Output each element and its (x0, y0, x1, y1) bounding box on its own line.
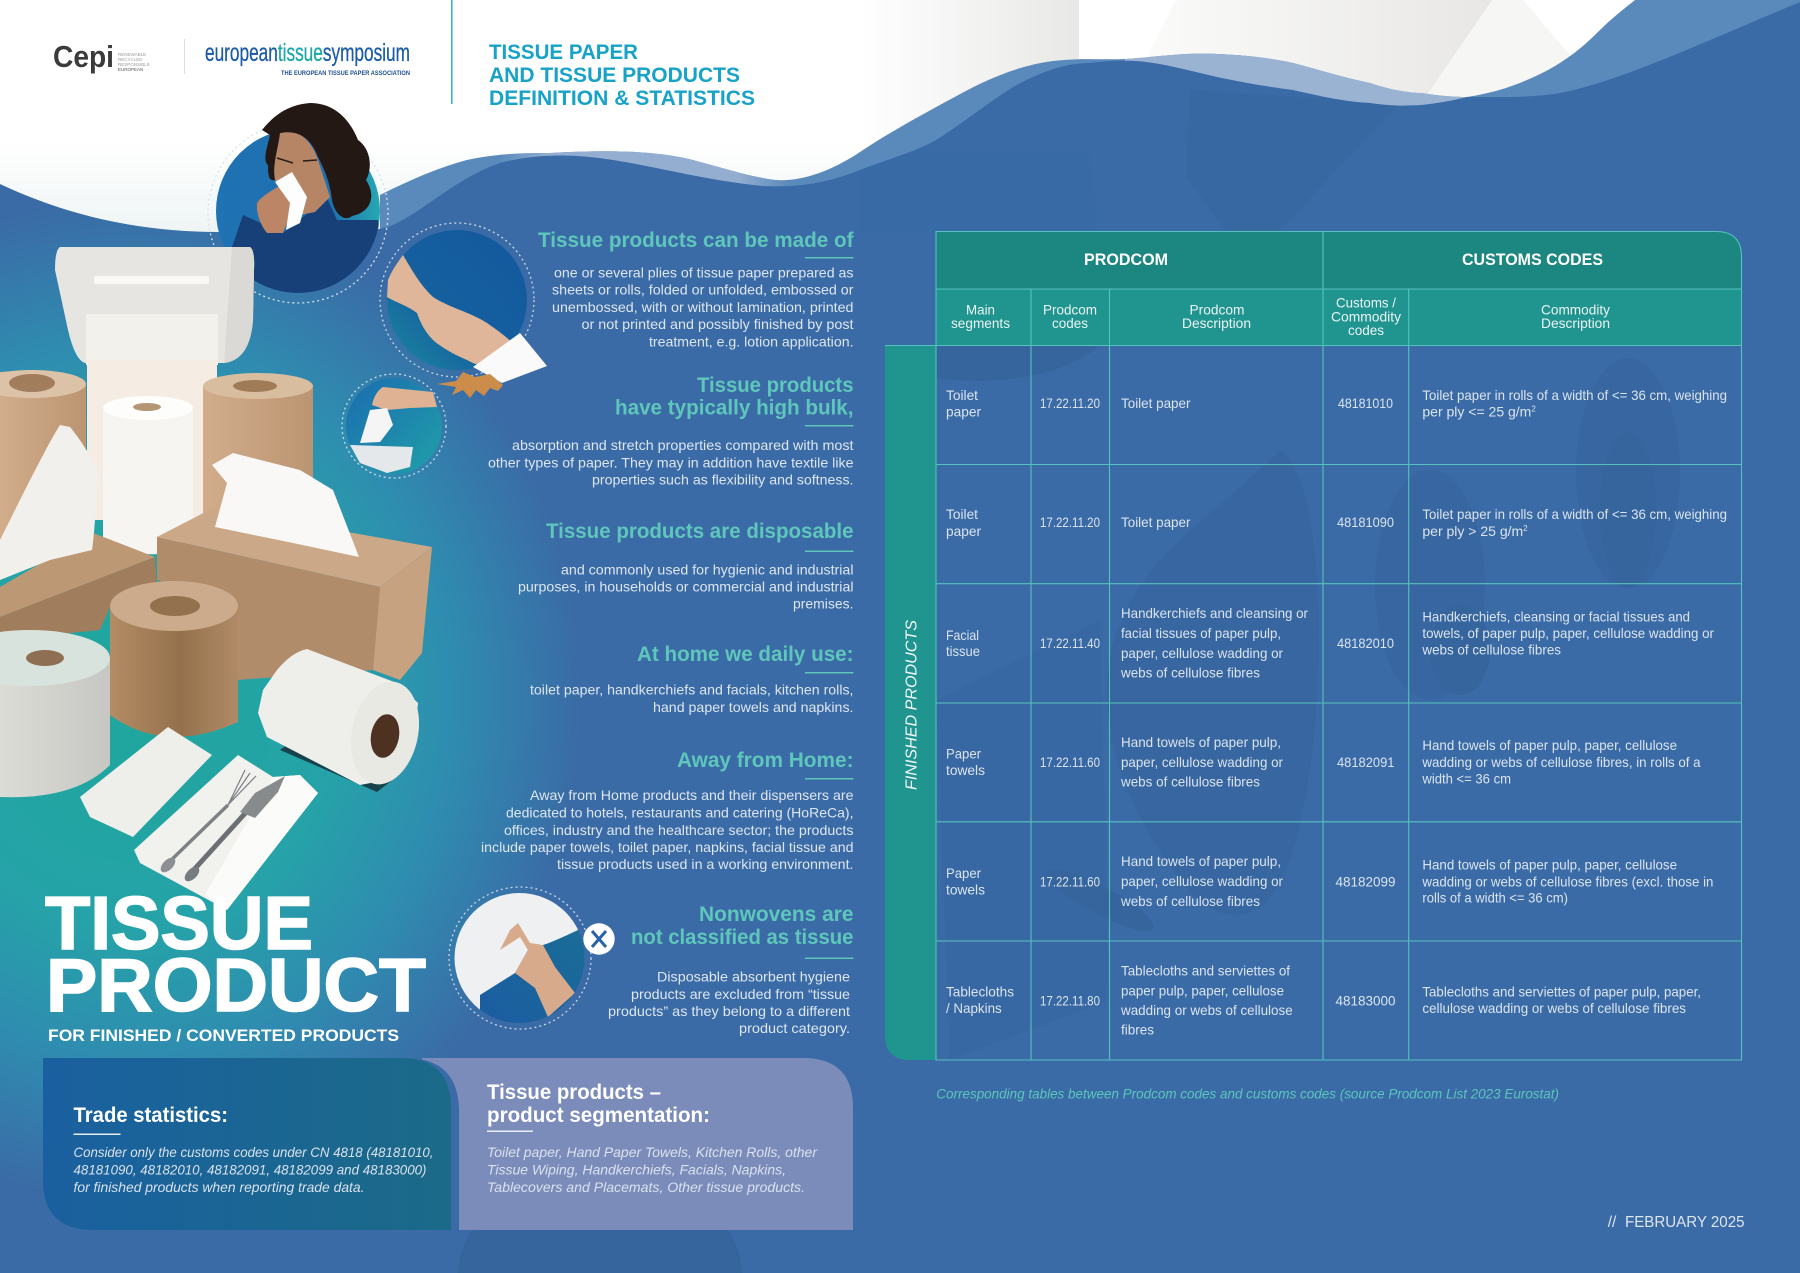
row: toilet paper 48181090: 17.22.11.20 (1040, 514, 1100, 530)
table grid (885, 232, 1742, 1060)
panel: trade statistics: 48181090, 48182010, 48182091, 48182099 and 48183000) (74, 1162, 426, 1178)
column headers: segments (951, 315, 1010, 331)
text block: high bulk: other types of paper. They may in addition have textile like (488, 454, 854, 470)
row: paper towels 48182099: wadding or webs of cellulose fibres (excl. those in (1421, 873, 1713, 889)
main title: FOR FINISHED / CONVERTED PRODUCTS (48, 1027, 399, 1045)
logo: european tissue symposium: europeantissuesymposium (205, 39, 410, 67)
title: definition and statistics (489, 40, 755, 110)
row: facial tissue: towels, of paper pulp, paper, cellulose wadding or (1422, 625, 1714, 641)
panel: trade statistics: for finished products when reporting trade data. (74, 1179, 364, 1195)
panel: product segmentation: Tissue Wiping, Handkerchiefs, Facials, Napkins, (487, 1162, 786, 1178)
text block: disposable (518, 520, 854, 612)
text block: away from home: offices, industry and the healthcare sector; the products (504, 822, 854, 838)
row: tablecloths and napkins: Tablecloths and serviettes of (1121, 963, 1290, 979)
column headers: Commodity (1331, 308, 1401, 324)
date: FEBRUARY 2025 (1625, 1214, 1744, 1231)
panel: trade statistics: Trade statistics: (74, 1104, 228, 1127)
row: tablecloths and napkins: / Napkins (946, 1000, 1002, 1016)
text block: nonwovens: Disposable absorbent hygiene (657, 968, 850, 984)
text block: away from home: Away from Home products and their dispensers are (530, 787, 854, 803)
photo: nonwoven material in hand (449, 885, 615, 1029)
row: paper towels 48182099: towels (946, 882, 985, 898)
main title: PRODUCT (46, 943, 426, 1027)
background: ghost rolls (458, 346, 1656, 1273)
row: toilet paper 48181090: per ply > 25 g/m (1422, 523, 1523, 539)
row: toilet paper 48181010: Toilet paper in rolls of a width of <= 36 cm, weighing (1422, 387, 1727, 403)
main title: TISSUE (45, 881, 313, 965)
text block: tissue products can be made of (538, 229, 854, 349)
photo: hand dropping tissue in bin (342, 374, 446, 478)
background: white top area (0, 0, 1800, 260)
row: facial tissue: Handkerchiefs and cleansing or (1121, 605, 1308, 621)
text block: nonwovens: Nonwovens are (699, 903, 854, 926)
panel: product segmentation: Toilet paper, Hand Paper Towels, Kitchen Rolls, other (487, 1144, 818, 1160)
row: paper towels 48182099: Paper (946, 865, 981, 881)
row: toilet paper 48181090: Toilet paper (1121, 514, 1191, 530)
column headers: Commodity (1541, 302, 1610, 318)
panel: product segmentation: product segmentation: (487, 1104, 710, 1127)
row: paper towels 48182099: Hand towels of paper pulp, paper, cellulose (1422, 856, 1677, 872)
logo: Cepi (53, 39, 150, 74)
column headers: Prodcom (1190, 302, 1244, 318)
row: toilet paper 48181010: paper (946, 404, 981, 420)
text block: high bulk: properties such as flexibility and softness. (592, 472, 854, 488)
kraft roll front (110, 581, 238, 737)
row: tablecloths and napkins: 48183000 (1336, 993, 1396, 1009)
column headers: codes (1052, 315, 1088, 331)
text block: tissue products can be made of: Tissue products can be made of (538, 229, 854, 252)
group headers: PRODCOM (1084, 251, 1168, 269)
title: definition and statistics: TISSUE PAPER (489, 40, 638, 64)
row: tablecloths and napkins: wadding or webs of cellulose (1120, 1002, 1293, 1018)
icon: spill splat (437, 372, 503, 398)
title: definition and statistics: DEFINITION & STATISTICS (489, 86, 755, 110)
row: toilet paper 48181090: Toilet paper in rolls of a width of <= 36 cm, weighing (1422, 506, 1727, 522)
text block: nonwovens: products” as they belong to a different (608, 1003, 850, 1019)
row: facial tissue: paper, cellulose wadding or (1121, 645, 1283, 661)
table header bands (936, 232, 1742, 346)
row: paper towels 48182099: 48182099 (1336, 873, 1396, 889)
row: tablecloths and napkins: cellulose wadding or webs of cellulose fibres (1422, 1000, 1686, 1016)
text block: nonwovens (608, 903, 854, 1036)
row: paper towels 48182099: rolls of a width <= 36 cm) (1422, 890, 1568, 906)
white kitchen roll (103, 396, 193, 554)
text block: disposable: Tissue products are disposable (546, 520, 854, 543)
row: facial tissue: webs of cellulose fibres (1120, 665, 1260, 681)
text block: away from home (481, 749, 854, 872)
title: definition and statistics: AND TISSUE PRODUCTS (489, 63, 740, 87)
background: translucent wave layer (380, 0, 1800, 300)
row: paper towels 48182091: width <= 36 cm (1421, 770, 1511, 786)
table source note: Corresponding tables between Prodcom codes and customs codes (source Prodcom List 2023 Eurostat) (936, 1086, 1559, 1102)
text block: disposable: purposes, in households or commercial and industrial (518, 579, 854, 595)
row: toilet paper 48181090: 2 (1523, 524, 1528, 533)
knife (182, 776, 285, 884)
logo: Cepi: EUROPEAN (118, 67, 143, 72)
kraft roll right (203, 373, 313, 520)
text block: nonwovens: product category. (739, 1020, 850, 1036)
row: paper towels 48182091: webs of cellulose fibres (1120, 774, 1260, 790)
left tissue (0, 425, 98, 580)
row: toilet paper 48181090 (946, 506, 1727, 539)
column headers (951, 295, 1610, 338)
text block: at home: toilet paper, handkerchiefs and facials, kitchen rolls, (530, 682, 854, 698)
table: prodcom and customs codes (885, 232, 1742, 1060)
logo: european tissue symposium (205, 39, 410, 77)
panel: product segmentation (380, 1058, 853, 1230)
row: toilet paper 48181010: per ply <= 25 g/m (1422, 404, 1531, 420)
text block: tissue products can be made of: treatment, e.g. lotion application. (649, 333, 854, 349)
logo: Cepi: RENEWABLE (118, 52, 146, 57)
text block: high bulk: Tissue products (697, 374, 854, 397)
column headers: Prodcom (1043, 302, 1097, 318)
text block: at home: At home we daily use: (637, 643, 854, 666)
row: paper towels 48182091: Hand towels of paper pulp, paper, cellulose (1422, 737, 1677, 753)
header logos (53, 39, 410, 77)
main title (45, 881, 426, 1045)
row: tablecloths and napkins: Tablecloths (946, 984, 1014, 1000)
photo: tissue products stack (0, 247, 432, 910)
row: toilet paper 48181010: 48181010 (1338, 395, 1393, 411)
logo: european tissue symposium: THE EUROPEAN TISSUE PAPER ASSOCIATION (281, 71, 410, 77)
dispenser (55, 247, 254, 363)
text block: disposable: premises. (793, 596, 854, 612)
row: paper towels 48182099: Hand towels of paper pulp, (1121, 853, 1281, 869)
text block: away from home: dedicated to hotels, restaurants and catering (HoReCa), (506, 804, 854, 820)
row: facial tissue: webs of cellulose fibres (1421, 642, 1561, 658)
group headers: CUSTOMS CODES (1462, 251, 1603, 269)
text block: tissue products can be made of: sheets or rolls, folded or unfolded, embossed or (552, 282, 854, 298)
row: facial tissue: facial tissues of paper pulp, (1121, 625, 1281, 641)
panel: trade statistics: Consider only the customs codes under CN 4818 (48181010, (74, 1144, 434, 1160)
column headers: Description (1182, 315, 1251, 331)
row: paper towels 48182091: Paper (946, 746, 981, 762)
row: facial tissue: 17.22.11.40 (1040, 635, 1100, 651)
logo: Cepi: Cepi (53, 39, 114, 74)
row: paper towels 48182091: Hand towels of paper pulp, (1121, 734, 1281, 750)
row: tablecloths and napkins: 17.22.11.80 (1040, 993, 1100, 1009)
row: toilet paper 48181010: Toilet paper (1121, 395, 1191, 411)
column headers: codes (1348, 322, 1384, 338)
panel: product segmentation: Tissue products – (487, 1081, 661, 1104)
row: paper towels 48182091: 17.22.11.60 (1040, 754, 1100, 770)
text block: at home (530, 643, 854, 715)
row: tablecloths and napkins: paper pulp, paper, cellulose (1121, 982, 1284, 998)
text block: away from home: include paper towels, toilet paper, napkins, facial tissue and (481, 839, 854, 855)
row: facial tissue (946, 605, 1714, 681)
column headers: Description (1541, 315, 1610, 331)
napkin with cutlery (134, 755, 318, 910)
row: toilet paper 48181010 (946, 387, 1727, 420)
grey roll left (0, 630, 110, 797)
row: paper towels 48182091: paper, cellulose wadding or (1121, 754, 1283, 770)
logo: Cepi: RESPONSIBLE (118, 62, 150, 67)
column headers: Customs / (1336, 295, 1396, 311)
row: toilet paper 48181090: Toilet (946, 506, 978, 522)
side tab: finished products (885, 346, 936, 1060)
text block: high bulk (488, 374, 854, 488)
row: tablecloths and napkins (946, 963, 1701, 1038)
row: paper towels 48182091: wadding or webs of cellulose fibres, in rolls of a (1421, 754, 1701, 770)
text block: disposable: and commonly used for hygienic and industrial (561, 562, 854, 578)
row: toilet paper 48181090: 48181090 (1337, 514, 1394, 530)
tissue emerging (212, 453, 359, 557)
icon: not classified cross (583, 923, 615, 955)
paper sheet (87, 360, 217, 520)
group headers (1084, 251, 1603, 269)
row: facial tissue: Facial (946, 627, 979, 643)
text block: away from home: Away from Home: (677, 749, 854, 772)
text block: tissue products can be made of: one or several plies of tissue paper prepared as (554, 264, 854, 280)
column headers: Main (966, 302, 995, 318)
text block: nonwovens: products are excluded from “tissue (631, 986, 850, 1002)
row: paper towels 48182099: 17.22.11.60 (1040, 873, 1100, 889)
panel: product segmentation: Tablecovers and Placemats, Other tissue products. (487, 1179, 805, 1195)
row: paper towels 48182091 (946, 734, 1701, 790)
text block: high bulk: absorption and stretch properties compared with most (512, 437, 854, 453)
row: tablecloths and napkins: Tablecloths and serviettes of paper pulp, paper, (1422, 983, 1701, 999)
tissue box left (0, 533, 157, 640)
date: // (1608, 1214, 1617, 1231)
logo: Cepi: RECYCLED (118, 57, 143, 62)
row: facial tissue: 48182010 (1337, 635, 1394, 651)
photo: hand wiping spill in circle (380, 223, 547, 398)
text block: tissue products can be made of: or not printed and possibly finished by post (582, 316, 854, 332)
kraft roll left (0, 370, 86, 560)
row: facial tissue: Handkerchiefs, cleansing or facial tissues and (1422, 608, 1690, 624)
text block: tissue products can be made of: unembossed, with or without lamination, printed (552, 299, 854, 315)
tissue box right (157, 508, 432, 680)
panel: trade statistics (43, 1058, 451, 1230)
row: toilet paper 48181010: 2 (1531, 405, 1536, 414)
row: paper towels 48182099 (946, 853, 1713, 909)
text block: at home: hand paper towels and napkins. (653, 699, 854, 715)
side tab: finished products: FINISHED PRODUCTS (904, 620, 920, 790)
text block: high bulk: have typically high bulk, (615, 396, 854, 420)
folded napkin (80, 727, 212, 837)
row: paper towels 48182099: webs of cellulose fibres (1120, 893, 1260, 909)
fork (158, 770, 256, 875)
row: tablecloths and napkins: fibres (1121, 1022, 1154, 1038)
row: paper towels 48182099: paper, cellulose wadding or (1121, 873, 1283, 889)
photo: woman with tissue in circle (208, 103, 388, 303)
row: toilet paper 48181010: 17.22.11.20 (1040, 395, 1100, 411)
toilet roll lying (258, 649, 428, 792)
text block: away from home: tissue products used in a working environment. (557, 856, 854, 872)
text block: nonwovens: not classified as tissue (631, 926, 854, 949)
row: toilet paper 48181010: Toilet (946, 387, 978, 403)
row: paper towels 48182091: 48182091 (1337, 754, 1395, 770)
row: toilet paper 48181090: paper (946, 523, 981, 539)
row: paper towels 48182091: towels (946, 762, 985, 778)
row: facial tissue: tissue (946, 643, 980, 659)
